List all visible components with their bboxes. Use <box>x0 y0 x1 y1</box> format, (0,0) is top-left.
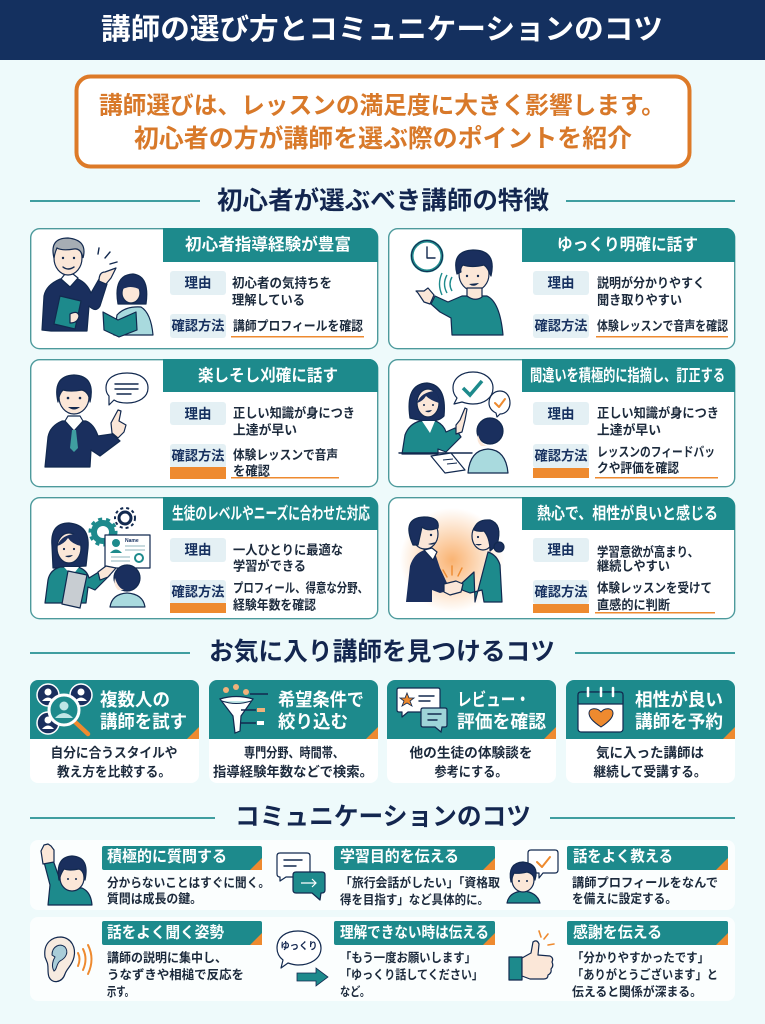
panel: actively corrects mistakes: クや評価を確認 <box>597 460 679 476</box>
panel: speaks slowly and clearly: 体験レッスンで音声を確認 <box>597 318 728 334</box>
tip: listening attitude: 講師の説明に集中し、 <box>107 950 227 965</box>
panel: experienced with beginners: 講師プロフィールを確認 <box>233 318 363 334</box>
panel: experienced with beginners: 確認方法 <box>172 318 225 334</box>
panel: communication row 1 <box>30 840 735 910</box>
icon: slowly speech bubble and arrow: ゆっくり <box>280 940 318 952</box>
panel: enthusiastic with good rapport: 直感的に判断 <box>597 598 670 612</box>
tip: ask questions <box>41 844 270 906</box>
panel: enthusiastic with good rapport: 体験レッスンを受けて <box>597 580 712 596</box>
panel: experienced with beginners <box>31 228 378 349</box>
panel: actively corrects mistakes <box>389 359 735 487</box>
panel: enthusiastic with good rapport: 学習意欲が高まり、 <box>597 544 699 560</box>
icon: clock and speaking person <box>412 240 503 335</box>
tip: listening attitude: うなずきや相槌で反応を <box>107 967 244 982</box>
panel: actively corrects mistakes: 正しい知識が身につき <box>597 406 719 420</box>
panel: experienced with beginners: 初心者指導経験が豊富 <box>185 234 351 254</box>
panel: book a compatible teacher: 継続して受講する。 <box>594 764 706 780</box>
panel: filter by conditions: 専門分野、時間帯、 <box>244 744 344 760</box>
icon: thumbs up <box>509 931 554 980</box>
panel: speaks clearly and enjoyably: 理由 <box>184 406 212 422</box>
tip: say when you don't understand: 理解できない時は伝える <box>340 924 489 942</box>
panel: filter by conditions: 希望条件で <box>278 690 364 710</box>
icon: teacher pointing with speech bubble <box>45 373 148 467</box>
panel: enthusiastic with good rapport <box>389 497 735 619</box>
panel: book a compatible teacher <box>566 680 735 783</box>
icon: magnifier over people <box>37 684 92 734</box>
tip: express thanks: 「ありがとうございます」と <box>572 967 718 982</box>
tip: share learning goals: 学習目的を伝える <box>340 846 459 866</box>
panel: book a compatible teacher: 気に入った講師は <box>596 744 704 760</box>
tip: express thanks: 伝えると関係が深まる。 <box>572 984 702 999</box>
panel: actively corrects mistakes: 確認方法 <box>534 448 588 464</box>
panel: check reviews <box>387 680 556 783</box>
tip: share learning goals: 「旅行会話がしたい」「資格取 <box>340 875 500 890</box>
panel: try several teachers: 複数人の <box>100 690 170 710</box>
panel: adapts to student level: プロフィール、得意な分野、 <box>233 580 368 596</box>
tip: ask questions: 分からないことはすぐに聞く。 <box>107 876 270 890</box>
tip: listening attitude: 示す。 <box>107 985 134 999</box>
tip: listening attitude: 話をよく聞く姿勢 <box>107 924 224 942</box>
callout: introduction: 初心者の方が講師を選ぶ際のポイントを紹介 <box>134 124 632 153</box>
panel: adapts to student level: 理由 <box>184 542 212 558</box>
tip: express thanks: 感謝を伝える <box>573 922 662 942</box>
panel: experienced with beginners: 初心者の気持ちを <box>232 276 332 290</box>
panel: speaks slowly and clearly: 説明が分かりやすく <box>597 276 705 290</box>
panel: enthusiastic with good rapport: 継続しやすい <box>597 558 670 574</box>
panel: filter by conditions: 絞り込む <box>278 712 348 732</box>
panel: try several teachers: 講師を試す <box>100 712 187 732</box>
callout: introduction: 講師選びは、レッスンの満足度に大きく影響します。 <box>99 92 665 120</box>
panel: speaks clearly and enjoyably: 楽しそし刈確に話す <box>198 366 338 385</box>
title banner: 講師の選び方とコミュニケーションのコツ <box>101 13 663 46</box>
panel: actively corrects mistakes: 上達が早い <box>597 422 661 438</box>
tip: express thanks <box>509 921 728 999</box>
panel: adapts to student level <box>31 497 378 619</box>
icon: teacher correcting student with check bubbles <box>399 372 510 473</box>
panel: filter by conditions: 指導経験年数などで検索。 <box>213 764 373 780</box>
tip: express thanks: 「分かりやすかったです」 <box>572 951 709 965</box>
heading: finding a favourite teacher: お気に入り講師を見つけるコツ <box>209 638 555 666</box>
tip: share learning goals <box>277 846 500 907</box>
icon: senior teacher and student with book <box>42 238 153 337</box>
panel: speaks slowly and clearly <box>389 228 735 349</box>
title banner <box>0 0 765 60</box>
tip: say when you don't understand: 「もう一度お願いします」 <box>340 950 476 965</box>
heading: teacher traits: 初心者が選ぶべき講師の特徴 <box>217 186 549 215</box>
tip: set preferences in profile <box>507 846 728 906</box>
panel: check reviews: 評価を確認 <box>457 712 546 732</box>
icon: funnel <box>220 684 268 733</box>
tip: say when you don't understand: 「ゆっくり話してください」 <box>340 968 483 982</box>
panel: speaks slowly and clearly: 聞き取りやすい <box>597 292 682 308</box>
panel: enthusiastic with good rapport: 確認方法 <box>534 584 588 600</box>
panel: adapts to student level: 生徒のレベルやニーズに合わせた対応 <box>172 503 370 523</box>
icon: handshake between teacher and student <box>400 508 504 612</box>
tip: set preferences in profile: を備えに設定する。 <box>572 891 677 906</box>
tip: set preferences in profile: 話をよく教える <box>573 846 673 866</box>
panel: enthusiastic with good rapport: 熱心で、相性が良いと感じる <box>537 503 718 523</box>
icon: student with check bubble <box>507 850 558 903</box>
icon: calendar with heart <box>578 688 623 732</box>
tip: ask questions: 積極的に質問する <box>107 846 227 866</box>
panel: speaks slowly and clearly: ゆっくり明確に話す <box>557 235 698 254</box>
icon: teacher with gears and profile card: Name <box>125 538 139 544</box>
panel: speaks clearly and enjoyably: 正しい知識が身につき <box>233 406 355 420</box>
panel: adapts to student level: 一人ひとりに最適な <box>233 542 343 558</box>
tip: ask questions: 質問は成長の鍵。 <box>107 891 202 906</box>
heading: communication tips: コミュニケーションのコツ <box>235 803 531 831</box>
panel: speaks slowly and clearly: 理由 <box>548 276 574 290</box>
icon: slowly speech bubble and arrow <box>277 931 328 986</box>
panel: filter by conditions <box>209 680 378 783</box>
panel: book a compatible teacher: 相性が良い <box>635 689 723 710</box>
panel: speaks clearly and enjoyably: 体験レッスンで音声 <box>233 448 338 462</box>
panel: check reviews: 参考にする。 <box>434 764 508 780</box>
panel: adapts to student level: 確認方法 <box>172 584 225 600</box>
icon: teacher with gears and profile card <box>45 508 150 608</box>
icon: student raising hand <box>41 844 92 905</box>
panel: try several teachers <box>30 680 199 783</box>
panel: experienced with beginners: 理解している <box>232 292 305 308</box>
tip: share learning goals: 得を目指す」など具体的に。 <box>340 892 489 907</box>
panel: speaks clearly and enjoyably <box>31 359 378 487</box>
panel: speaks clearly and enjoyably: 確認方法 <box>172 448 225 464</box>
panel: speaks clearly and enjoyably: 上達が早い <box>233 422 297 438</box>
panel: enthusiastic with good rapport: 理由 <box>548 542 574 558</box>
tip: say when you don't understand: など。 <box>340 984 370 999</box>
panel: try several teachers: 教え方を比較する。 <box>57 764 171 780</box>
panel: try several teachers: 自分に合うスタイルや <box>50 744 178 760</box>
tip: listening attitude <box>45 921 262 999</box>
panel: check reviews: 他の生徒の体験談を <box>410 744 532 760</box>
panel: adapts to student level: 経験年数を確認 <box>233 598 316 612</box>
callout: introduction <box>76 76 690 166</box>
icon: review bubbles with star <box>397 688 447 732</box>
tip: set preferences in profile: 講師プロフィールをなんで <box>572 875 718 890</box>
panel: actively corrects mistakes: 理由 <box>548 406 574 422</box>
tip: say when you don't understand <box>277 921 495 999</box>
panel: adapts to student level: 学習ができる <box>233 558 306 574</box>
panel: communication row 2 <box>30 917 735 1001</box>
icon: ear with sound waves <box>45 937 92 982</box>
panel: speaks slowly and clearly: 確認方法 <box>534 318 588 334</box>
icon: chat bubbles with arrow <box>277 853 325 900</box>
panel: check reviews: レビュー・ <box>457 689 530 710</box>
panel: speaks clearly and enjoyably: を確認 <box>233 464 270 478</box>
panel: experienced with beginners: 理由 <box>184 276 212 290</box>
panel: book a compatible teacher: 講師を予約 <box>635 712 723 732</box>
panel: actively corrects mistakes: レッスンのフィードバッ <box>597 444 715 460</box>
